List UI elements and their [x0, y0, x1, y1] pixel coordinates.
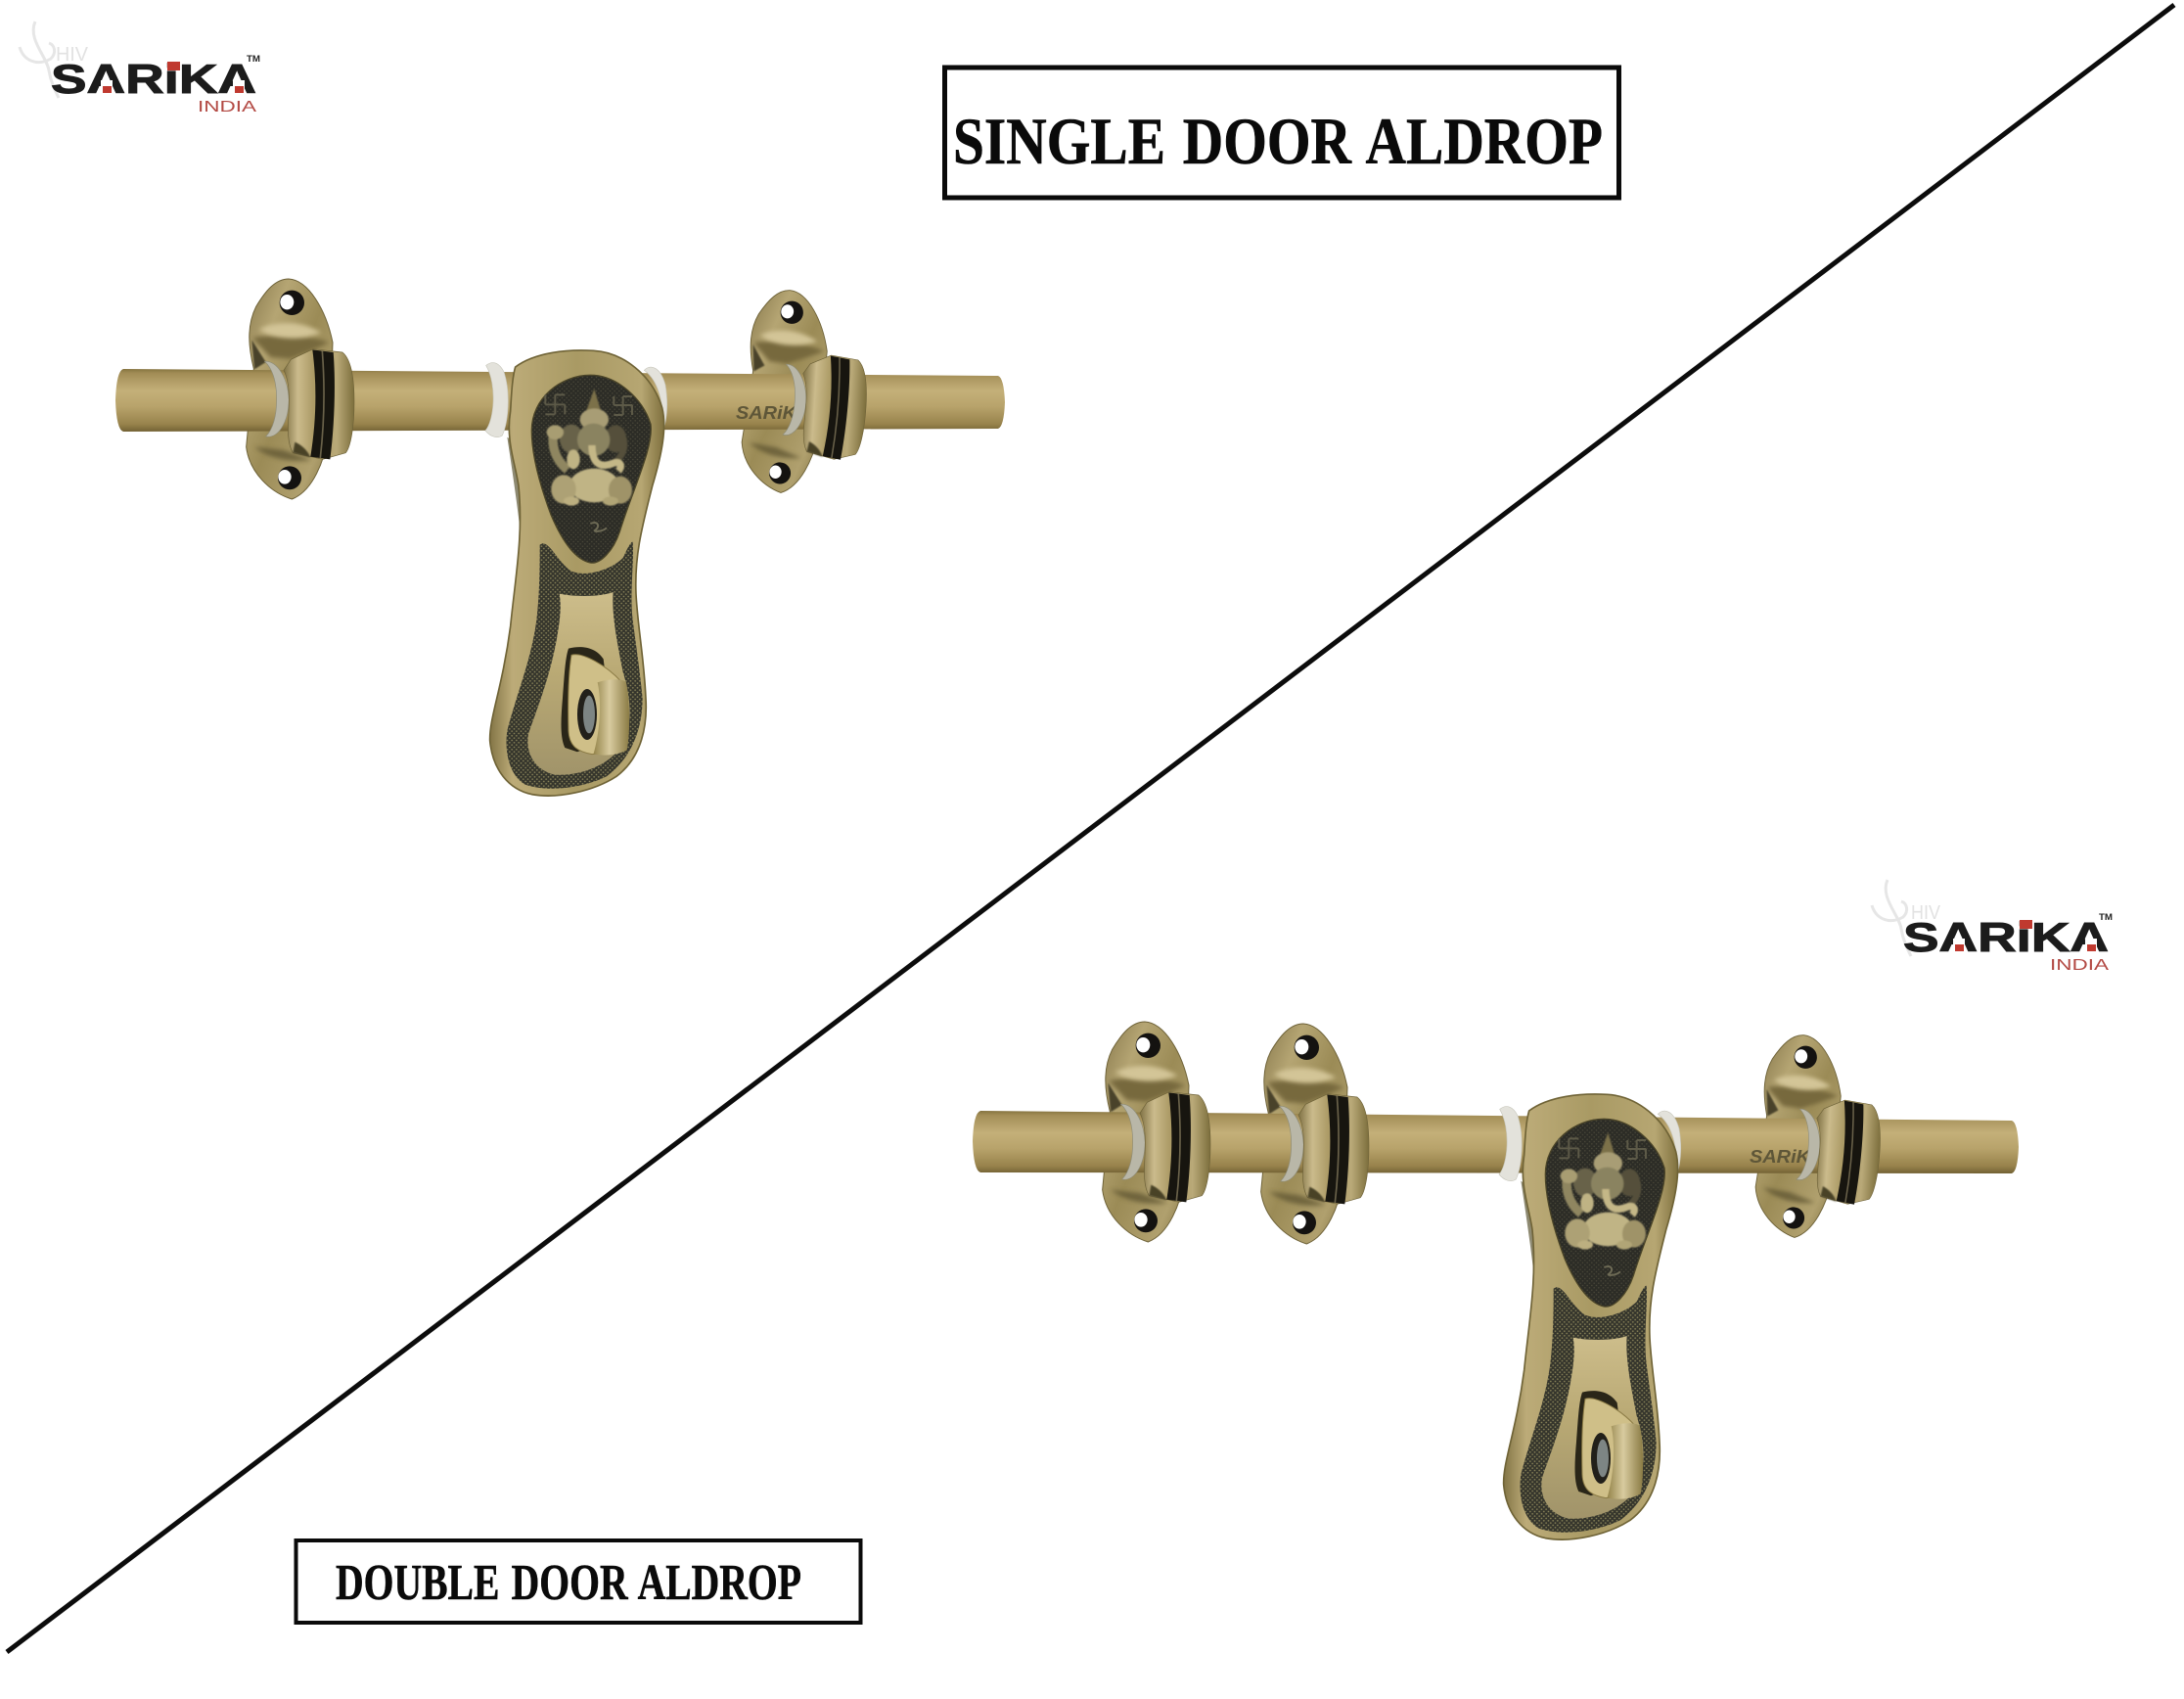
logo: Sarika India top left: SARiKA	[51, 56, 256, 102]
handle with ganesha relief	[1499, 1094, 1681, 1539]
logo: Sarika India top left: TM	[247, 54, 260, 64]
label: double door aldrop: DOUBLE DOOR ALDROP	[336, 1555, 801, 1611]
second mounting plate	[1261, 1024, 1347, 1244]
first collar	[1121, 1092, 1210, 1202]
third collar	[1795, 1097, 1883, 1206]
logo: Sarika India top left: HIV	[56, 44, 89, 66]
product: single door aldrop	[115, 279, 1005, 796]
title: single door aldrop	[945, 68, 1618, 198]
left mounting plate	[247, 279, 333, 499]
label: double door aldrop	[296, 1540, 861, 1623]
second collar	[1280, 1094, 1369, 1204]
rod engraving: SARiK	[736, 403, 798, 423]
logo: Sarika India top left: INDIA	[198, 99, 256, 115]
sliding rod	[115, 369, 1005, 432]
right mounting plate	[739, 288, 831, 495]
right collar	[781, 352, 869, 461]
title: single door aldrop: SINGLE DOOR ALDROP	[953, 104, 1603, 178]
logo: Sarika India lower right: HIV	[1911, 902, 1941, 924]
left collar	[265, 349, 354, 459]
sliding rod	[973, 1111, 2019, 1173]
first mounting plate	[1103, 1022, 1189, 1242]
rod engraving: SARiK	[1750, 1147, 1812, 1167]
logo: Sarika India lower right: SARiKA	[1903, 914, 2109, 960]
logo: Sarika India lower right: TM	[2099, 912, 2113, 922]
logo: Sarika India lower right: INDIA	[2050, 957, 2109, 974]
logo: Sarika India lower right	[1872, 880, 2113, 974]
handle with ganesha relief	[485, 350, 667, 796]
third mounting plate	[1752, 1033, 1844, 1240]
product: double door aldrop	[973, 1022, 2019, 1539]
logo: Sarika India top left	[20, 22, 260, 115]
